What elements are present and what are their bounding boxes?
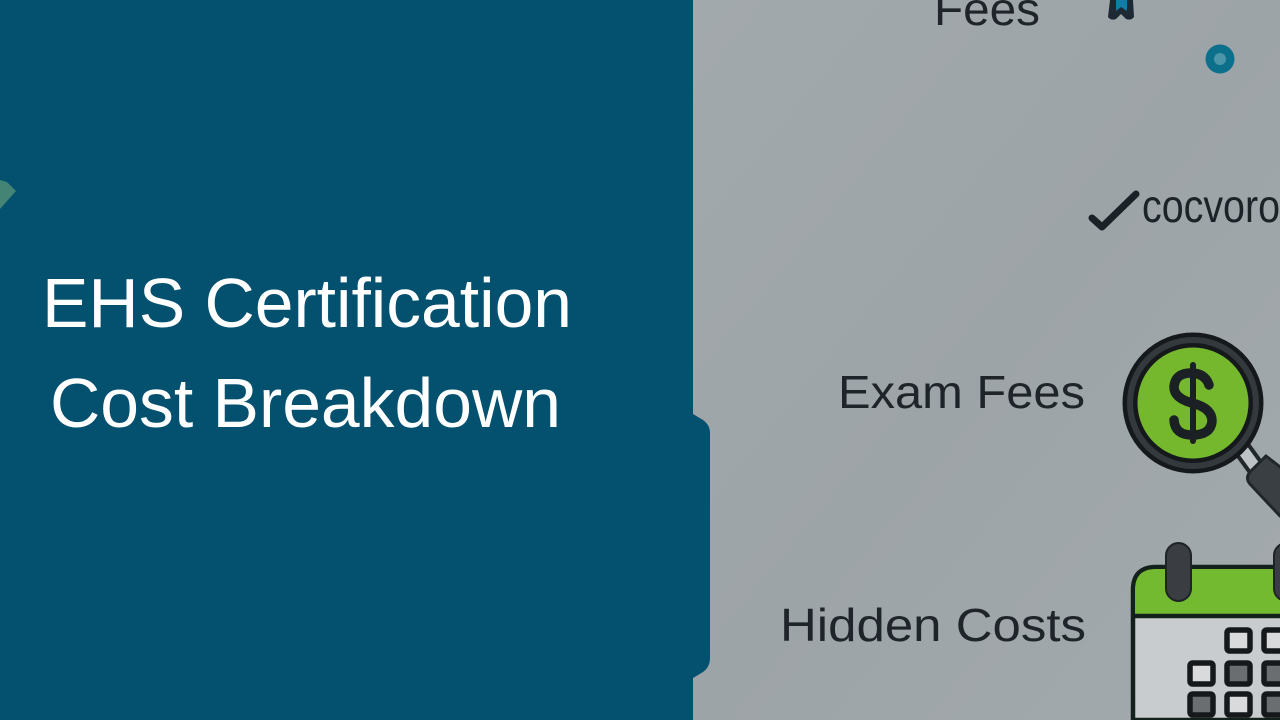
dollar sign xyxy=(1174,365,1212,441)
label: exam fees: Exam Fees xyxy=(838,366,1085,418)
calendar body xyxy=(1133,567,1280,720)
icon: ribbon fragment xyxy=(1108,0,1134,20)
icon: magnifying glass with dollar xyxy=(1130,340,1280,516)
icon: calendar xyxy=(1133,543,1280,720)
title: EHS Certification xyxy=(42,264,572,342)
title: Cost Breakdown xyxy=(50,364,561,442)
icon: faint arrow fragment xyxy=(0,180,16,209)
calendar header xyxy=(1135,569,1280,615)
panel: right grey background xyxy=(693,0,1280,720)
calendar day cells xyxy=(1190,630,1280,715)
panel: left blue title panel xyxy=(0,0,710,720)
calendar rings xyxy=(1166,543,1280,601)
label: hidden costs: Hidden Costs xyxy=(780,599,1086,651)
icon: check mark xyxy=(1092,194,1136,227)
icon: teal dot xyxy=(1206,44,1234,74)
title xyxy=(42,264,572,442)
